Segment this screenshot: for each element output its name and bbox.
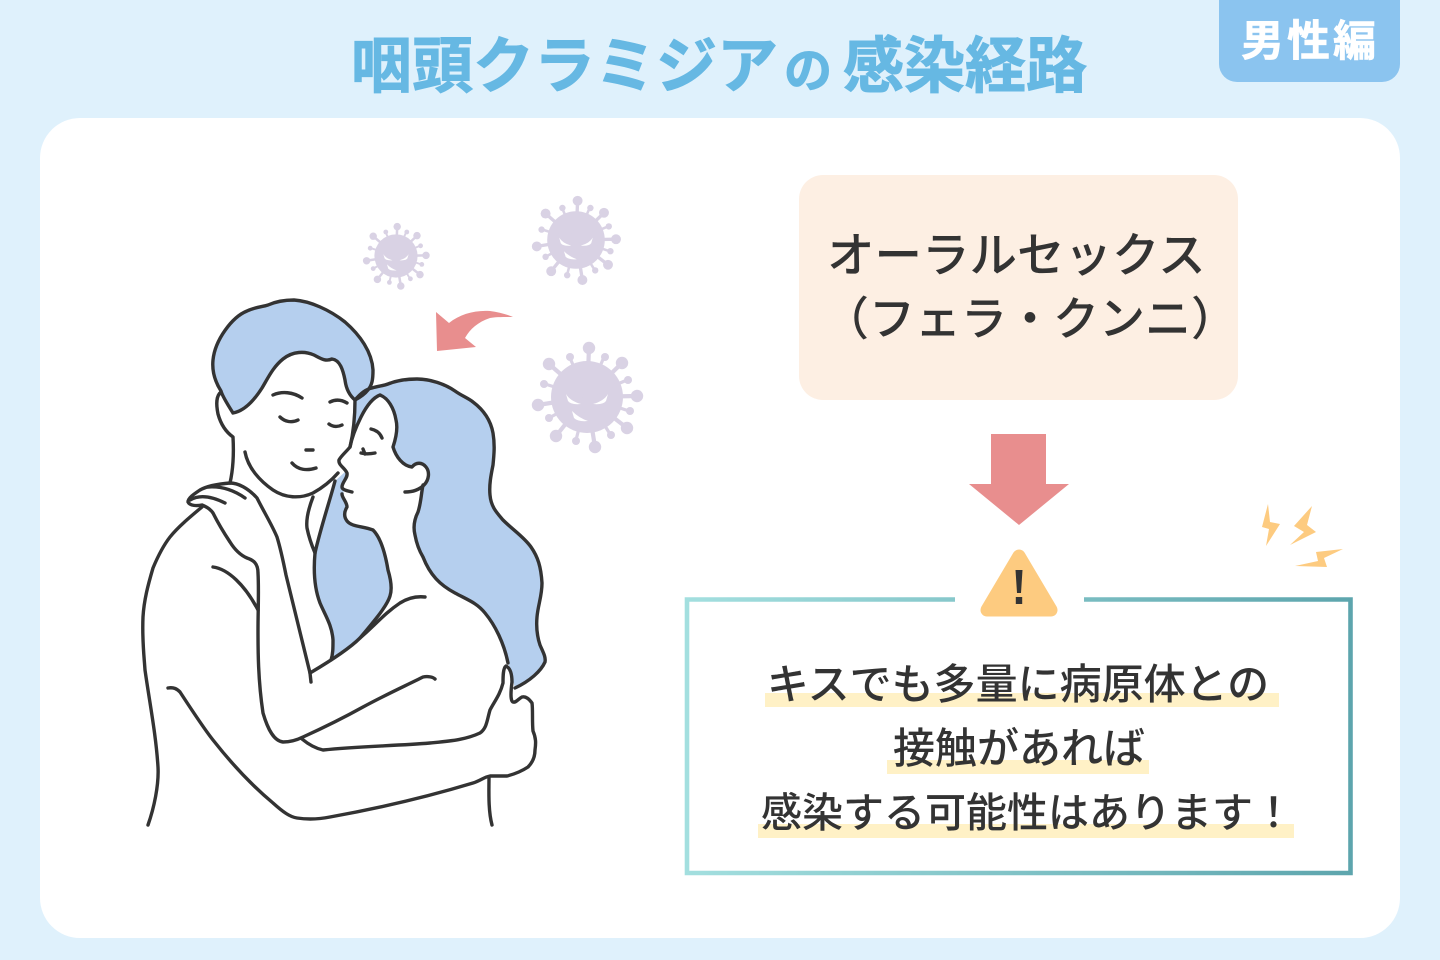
virus: small: [363, 223, 430, 290]
title: の: [784, 45, 832, 98]
virus: medium: [532, 196, 621, 285]
woman's hair: [314, 379, 545, 688]
down arrow: [969, 434, 1069, 525]
title: 感染経路: [843, 32, 1087, 100]
highlight and text: line 1: キスでも多量に病原体との: [767, 661, 1269, 708]
illustration: couple embracing: [143, 300, 545, 825]
man's hair: [213, 300, 373, 413]
icon: warning triangle: [987, 556, 1051, 610]
title: 咽頭クラミジア: [351, 32, 778, 100]
warning box: [687, 600, 1350, 873]
highlight and text: line 2: 接触があれば: [893, 725, 1145, 772]
box: oral sex: オーラルセックス: [827, 230, 1206, 283]
highlight and text: line 3: 感染する可能性はあります！: [761, 790, 1294, 836]
virus: large: [532, 342, 643, 453]
box: oral sex: [799, 175, 1238, 400]
curved arrow: [436, 311, 513, 351]
tag: 男性編: [1219, 0, 1400, 82]
line art: [143, 300, 545, 825]
icon: lightning bolts: [1262, 504, 1343, 567]
box: oral sex: （フェラ・クンニ）: [823, 293, 1237, 345]
tag: 男性編: 男性編: [1241, 18, 1379, 66]
